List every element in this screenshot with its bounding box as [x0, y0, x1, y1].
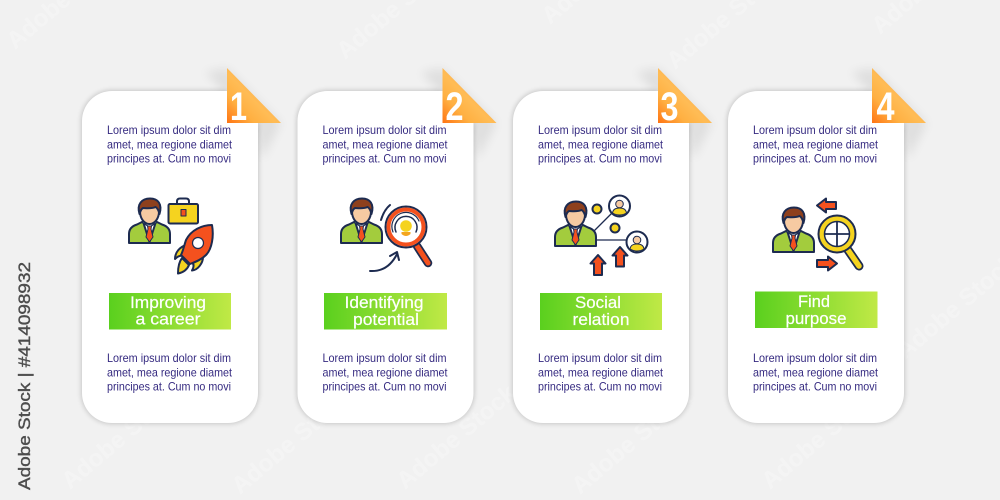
- watermark: Adobe Stock: [57, 379, 187, 495]
- top text 4: Lorem ipsum dolor sit dim: [753, 123, 877, 137]
- number badge 1: [227, 68, 281, 129]
- bottom text 3: amet, mea regione diamet: [538, 365, 664, 379]
- label bar 2: Identifying: [344, 293, 424, 312]
- top text 1: [107, 123, 233, 166]
- top text 3: Lorem ipsum dolor sit dim: [538, 123, 662, 137]
- label bar 3: Social: [575, 293, 621, 312]
- label bar 1: Improving: [130, 293, 206, 312]
- watermark: Adobe Stock: [757, 379, 887, 495]
- bottom text 1: amet, mea regione diamet: [107, 365, 233, 379]
- top text 3: amet, mea regione diamet: [538, 137, 664, 151]
- top text 4: principes at. Cum no movi: [753, 152, 877, 166]
- panel: card 1 improving a career: [82, 68, 281, 423]
- stock id caption: Adobe Stock | #414098932: [15, 262, 34, 490]
- top text 2: principes at. Cum no movi: [322, 152, 446, 166]
- top text 2: Lorem ipsum dolor sit dim: [322, 123, 447, 137]
- icon: person with magnifier and bulb: [341, 198, 428, 271]
- bottom text 1: Lorem ipsum dolor sit dim: [107, 351, 231, 365]
- bottom text 2: [322, 351, 448, 394]
- bottom text 4: amet, mea regione diamet: [753, 365, 879, 379]
- number badge 2: 2: [446, 85, 464, 129]
- panel: card 4 find purpose: [728, 68, 927, 423]
- bottom text 1: [107, 351, 233, 394]
- bottom text 1: principes at. Cum no movi: [107, 380, 231, 394]
- icon: person with social connections: [555, 196, 648, 275]
- number badge 4: [872, 68, 926, 129]
- top text 1: principes at. Cum no movi: [107, 152, 231, 166]
- top text 3: [538, 123, 664, 166]
- top text 4: [753, 123, 879, 166]
- number badge 4: 4: [876, 85, 895, 129]
- label bar 4: Find: [798, 292, 830, 311]
- top text 2: [322, 123, 448, 166]
- panel: card 2 identifying potential: [298, 68, 496, 423]
- bottom text 4: principes at. Cum no movi: [753, 380, 877, 394]
- number badge 1: 1: [230, 85, 247, 129]
- icon: person with briefcase and rocket: [129, 198, 213, 274]
- label bar 3: [540, 293, 662, 330]
- top text 1: amet, mea regione diamet: [107, 137, 233, 151]
- label bar 1: a career: [136, 310, 201, 328]
- icon: person with target magnifier: [773, 198, 859, 270]
- bottom text 2: Lorem ipsum dolor sit dim: [322, 351, 447, 365]
- number badge 2: [442, 68, 496, 129]
- bottom text 3: Lorem ipsum dolor sit dim: [538, 351, 662, 365]
- bottom text 2: amet, mea regione diamet: [322, 365, 448, 379]
- watermark: Adobe Stock: [227, 384, 357, 500]
- label bar 4: [755, 292, 878, 328]
- label bar 2: [324, 293, 447, 330]
- bottom text 4: Lorem ipsum dolor sit dim: [753, 351, 877, 365]
- panel: card 3 social relation: [513, 68, 712, 423]
- top text 4: amet, mea regione diamet: [753, 137, 879, 151]
- label bar 4: purpose: [786, 309, 846, 328]
- top text 3: principes at. Cum no movi: [538, 152, 662, 166]
- watermark: Adobe Stock: [392, 379, 522, 495]
- top text 1: Lorem ipsum dolor sit dim: [107, 123, 231, 137]
- bottom text 3: [538, 351, 664, 394]
- label bar 2: potential: [353, 310, 419, 329]
- label bar 3: relation: [572, 310, 630, 329]
- bottom text 2: principes at. Cum no movi: [322, 380, 446, 394]
- top text 2: amet, mea regione diamet: [322, 137, 448, 151]
- watermark: Adobe Stock: [567, 384, 697, 500]
- number badge 3: 3: [660, 85, 678, 129]
- label bar 1: [109, 293, 231, 330]
- number badge 3: [658, 68, 712, 129]
- bottom text 3: principes at. Cum no movi: [538, 380, 662, 394]
- bottom text 4: [753, 351, 879, 394]
